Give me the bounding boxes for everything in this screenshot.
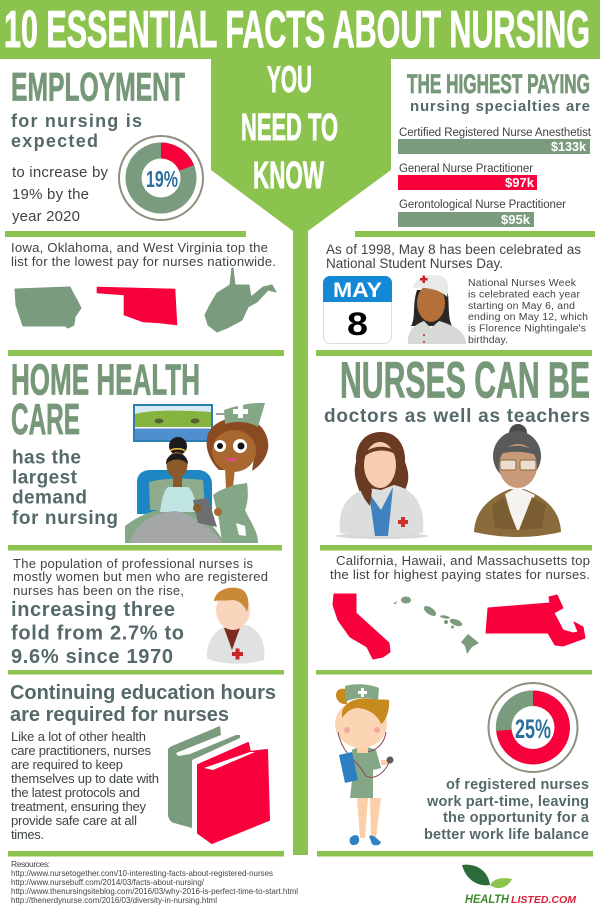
text: national nurses week [468, 277, 588, 346]
banner subtitle: KNOW [253, 155, 324, 197]
bar: CRNA $133k [398, 127, 592, 154]
resources: http://www.thenursingsiteblog.com/2016/03/why-2016-is-perfect-time-to-start.html [11, 886, 298, 896]
text: highest paying states: the list for highest paying states for nurses. [330, 567, 590, 582]
panel: part-time [335, 683, 590, 845]
logo: Health Listed: HEALTH [465, 892, 509, 906]
banner subtitle: NEED TO [241, 107, 338, 149]
subheading: largest demand: demand [12, 488, 87, 508]
text: continuing education body: the latest protocols and [11, 785, 140, 800]
text: part-time: better work life balance [424, 827, 589, 843]
logo: Health Listed [462, 865, 577, 906]
text: continuing education body: are required to keep [11, 757, 123, 772]
text: lowest pay [11, 240, 276, 269]
text: lowest pay: list for the lowest pay for nurses nationwide. [11, 254, 276, 269]
text: population: mostly women but men who are registered [13, 569, 268, 584]
heading: home health care: CARE [11, 395, 80, 444]
bar: gerontological NP $95k [398, 199, 566, 227]
icon: teacher [474, 424, 561, 537]
text: continuing education body: times. [11, 827, 44, 842]
icon: calendar [323, 276, 392, 344]
panel: student nurses day [323, 242, 588, 346]
text: May 8: National Student Nurses Day. [326, 256, 503, 271]
icon: books [168, 726, 269, 843]
text: population [13, 556, 268, 598]
text: national nurses week: birthday. [468, 334, 508, 346]
text: part-time: the opportunity for a [443, 810, 590, 826]
map: Iowa [15, 287, 81, 328]
icon: calendar: 8 [347, 306, 368, 342]
text: part-time: of registered nurses [446, 777, 589, 793]
donut chart: 25% [488, 683, 578, 772]
icon: male nurse [207, 588, 264, 664]
text: to increase by 19%: to increase by [12, 164, 108, 181]
resources [11, 859, 298, 905]
bar: gerontological NP $95k: $95k [501, 212, 531, 227]
bar: general NP $97k: General Nurse Practitioner [399, 163, 533, 175]
heading: home health care [11, 356, 200, 444]
nurse [193, 403, 268, 543]
bed and patient [125, 437, 224, 543]
text: national nurses week: is celebrated each year [468, 288, 580, 300]
text: national nurses week: ending on May 12, which [468, 311, 588, 323]
panel: continuing education [10, 682, 276, 843]
map: Massachusetts [486, 595, 585, 646]
icon: nurse bust [408, 275, 466, 344]
icon: calendar: MAY [333, 279, 382, 302]
subheading: largest demand: for nursing [12, 508, 118, 529]
subheading: doctors and teachers: doctors as well as teachers [324, 406, 590, 427]
donut chart: 25%: 25% [515, 714, 551, 744]
map: West Virginia [205, 268, 276, 332]
resources: http://www.nursetogether.com/10-interesting-facts-about-registered-nurses [11, 868, 273, 878]
subheading: for nursing is expected [11, 111, 142, 151]
subheading: largest demand: largest [12, 468, 78, 488]
wall painting [134, 405, 212, 441]
donut chart: 19%: 19% [146, 166, 178, 192]
text: to increase by 19%: year 2020 [12, 208, 80, 225]
map: California [333, 594, 390, 659]
text: population: The population of professional nurses is [13, 556, 254, 571]
subheading: for nursing is expected: for nursing is [11, 111, 142, 131]
callout: increasing three fold: 9.6% since 1970 [11, 646, 173, 668]
resources: http://thenerdynurse.com/2016/03/diversity-in-nursing.html [11, 895, 217, 905]
text: national nurses week: National Nurses Week [468, 277, 577, 289]
text: continuing education body [11, 729, 159, 842]
resources: Resources: [11, 859, 50, 869]
subheading: for nursing is expected: expected [11, 131, 98, 151]
text: May 8: As of 1998, May 8 has been celebrated as [326, 242, 581, 257]
text: lowest pay: Iowa, Oklahoma, and West Virginia top the [11, 240, 268, 255]
heading: home health care: HOME HEALTH [11, 356, 200, 404]
heading: continuing education: are required for nurses [10, 704, 229, 726]
text: national nurses week: starting on May 6, and [468, 300, 575, 312]
text: continuing education body: Like a lot of other health [11, 729, 146, 744]
resources: http://www.nursebuff.com/2014/03/facts-about-nursing/ [11, 877, 205, 887]
text: continuing education body: provide safe care at all [11, 813, 137, 828]
bar: general NP $97k: $97k [505, 175, 535, 190]
text: part-time: work part-time, leaving [426, 794, 589, 810]
map: Oklahoma [97, 287, 177, 325]
text: continuing education body: themselves up to date with [11, 771, 159, 786]
bar: general NP $97k [398, 163, 537, 190]
panel: employment [11, 66, 203, 225]
text: part-time [424, 777, 590, 843]
subheading: largest demand [12, 448, 118, 529]
text: highest paying states [330, 553, 590, 582]
donut chart: 19% [119, 136, 203, 220]
text: continuing education body: care practitioners, nurses [11, 743, 152, 758]
callout: increasing three fold [11, 599, 184, 668]
callout: increasing three fold: increasing three [11, 599, 175, 621]
text: national nurses week: is Florence Nightingale's [468, 322, 586, 334]
banner subtitle: YOU [267, 59, 312, 100]
callout: increasing three fold: fold from 2.7% to [11, 622, 184, 644]
text: highest paying states: California, Hawaii, and Massachusetts top [336, 553, 590, 568]
text: population: nurses has been on the rise, [13, 583, 184, 598]
subheading: largest demand: has the [12, 448, 81, 468]
logo: Health Listed: LISTED.COM [511, 895, 577, 906]
bar: CRNA $133k: Certified Registered Nurse Anesthetist [399, 127, 592, 139]
text: to increase by 19% [12, 164, 108, 225]
map: Hawaii [393, 596, 479, 654]
text: continuing education body: treatment, ensuring they [11, 799, 146, 814]
panel: highest paying states [330, 553, 590, 659]
illustration: nurse with patient [125, 403, 268, 543]
text: May 8 [326, 242, 581, 271]
bar: CRNA $133k: $133k [551, 139, 587, 154]
icon: female doctor [336, 432, 428, 539]
panel: home health care [11, 356, 268, 543]
illustration: nurse with stethoscope [335, 684, 394, 845]
banner subtitle [241, 59, 338, 197]
text: to increase by 19%: 19% by the [12, 186, 89, 203]
panel: nurses can be [324, 352, 590, 539]
heading: continuing education: Continuing education hours [10, 682, 276, 704]
bar: gerontological NP $95k: Gerontological Nurse Practitioner [399, 199, 566, 211]
panel: men in nursing [11, 556, 268, 668]
heading: continuing education [10, 682, 276, 726]
panel: lowest pay states [11, 240, 276, 332]
subheading: nursing specialties are [410, 98, 590, 115]
heading: employment: EMPLOYMENT [11, 66, 185, 110]
panel: highest paying specialties [398, 69, 592, 227]
